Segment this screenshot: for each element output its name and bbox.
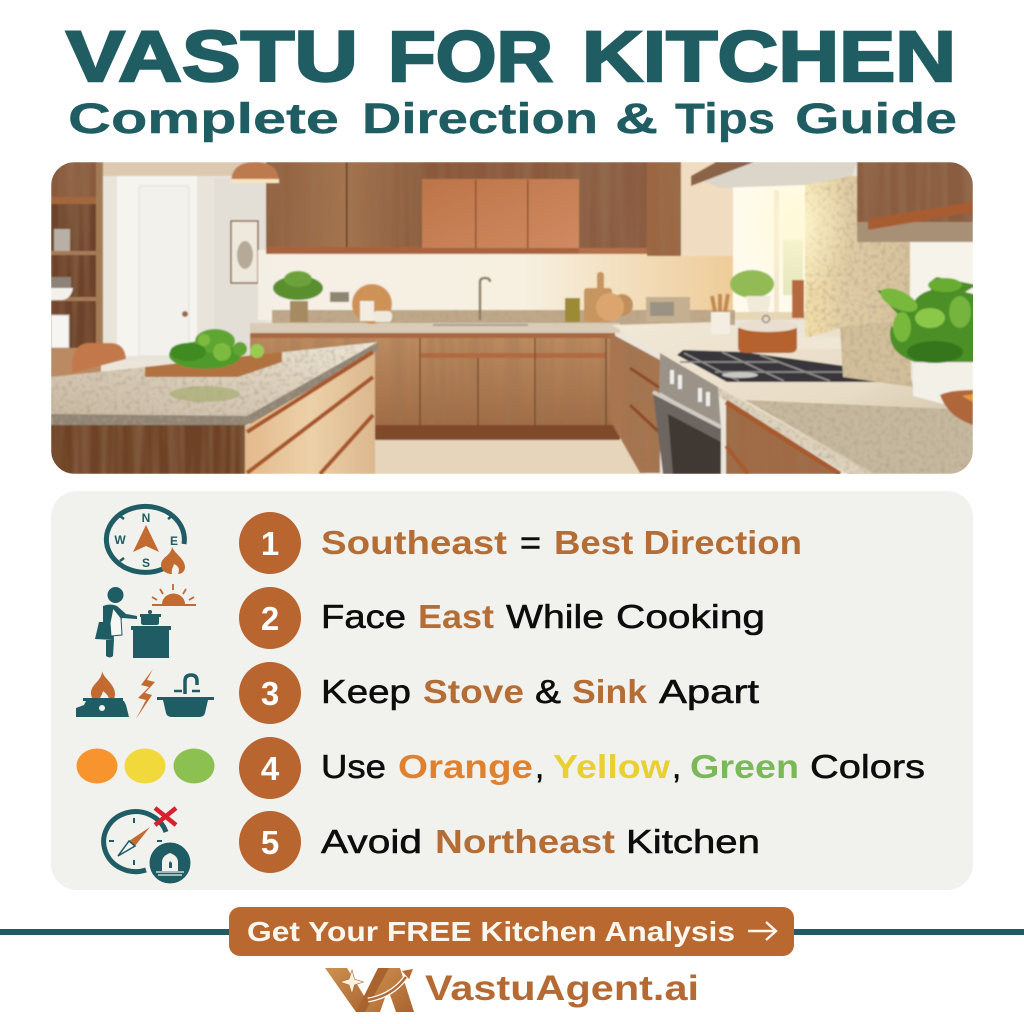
icon: stove and sink apart	[76, 669, 214, 719]
icon: compass with flame: N	[142, 511, 150, 525]
tip 4: Yellow	[553, 748, 670, 785]
title	[66, 18, 956, 97]
tip 3	[239, 662, 759, 724]
tip 4	[239, 737, 925, 799]
tip 2: Cooking	[616, 598, 765, 635]
tip 2: While	[506, 598, 604, 635]
call-to-action button	[229, 907, 794, 956]
tip 4: ,	[535, 748, 544, 785]
tip 4: Use	[321, 748, 386, 785]
tip 3: 3	[261, 675, 279, 712]
tip 3: Apart	[659, 673, 759, 710]
icon: colour swatches	[76, 748, 214, 784]
subtitle: &	[615, 95, 658, 143]
tip 5: Northeast	[435, 823, 615, 860]
tip 3: Stove	[423, 673, 524, 710]
icon: compass with cross and temple	[104, 808, 191, 884]
tip 1	[239, 512, 802, 574]
subtitle: Direction	[362, 95, 598, 143]
subtitle: Complete	[68, 95, 339, 143]
logo	[325, 968, 699, 1012]
tip 1: Southeast	[321, 524, 507, 561]
tip 5: Avoid	[321, 823, 422, 860]
tip 2	[239, 587, 765, 649]
logo mark: VA	[325, 968, 414, 1012]
title: KITCHEN	[582, 18, 956, 97]
title: FOR	[388, 18, 553, 97]
tip 4: Green	[690, 748, 799, 785]
icon: compass with flame: W	[114, 533, 126, 547]
tip 4: Colors	[810, 748, 925, 785]
subtitle: Tips	[675, 95, 775, 143]
tip 5	[239, 811, 760, 873]
call-to-action button: Get Your FREE Kitchen Analysis	[247, 916, 735, 947]
subtitle: Guide	[795, 95, 957, 143]
kitchen photo illustration	[51, 155, 989, 476]
title: VASTU	[66, 18, 358, 97]
tip 3: Keep	[321, 673, 411, 710]
tip 2: 2	[261, 600, 279, 637]
tip 3: Sink	[572, 673, 648, 710]
tip 2: East	[418, 598, 494, 635]
tip 2: Face	[321, 598, 406, 635]
icon: arrow	[748, 922, 776, 940]
tip 3: &	[535, 673, 561, 710]
subtitle	[68, 95, 957, 143]
icon: compass with flame: S	[142, 556, 150, 570]
tip 1: Best Direction	[554, 524, 802, 561]
icon: compass with flame: E	[170, 534, 178, 548]
divider line	[0, 929, 1024, 935]
icon: compass with flame	[106, 506, 185, 574]
tip 5: 5	[261, 824, 279, 861]
tip 4: ,	[672, 748, 681, 785]
tip 1: =	[520, 524, 541, 561]
icon: person cooking facing sunrise	[95, 584, 196, 658]
tip 5: Kitchen	[626, 823, 760, 860]
tip 4: 4	[261, 750, 280, 787]
panel: five tips	[51, 491, 973, 890]
logo: VastuAgent.ai	[425, 969, 699, 1008]
tip 4: Orange	[398, 748, 533, 785]
tip 1: 1	[261, 525, 279, 562]
